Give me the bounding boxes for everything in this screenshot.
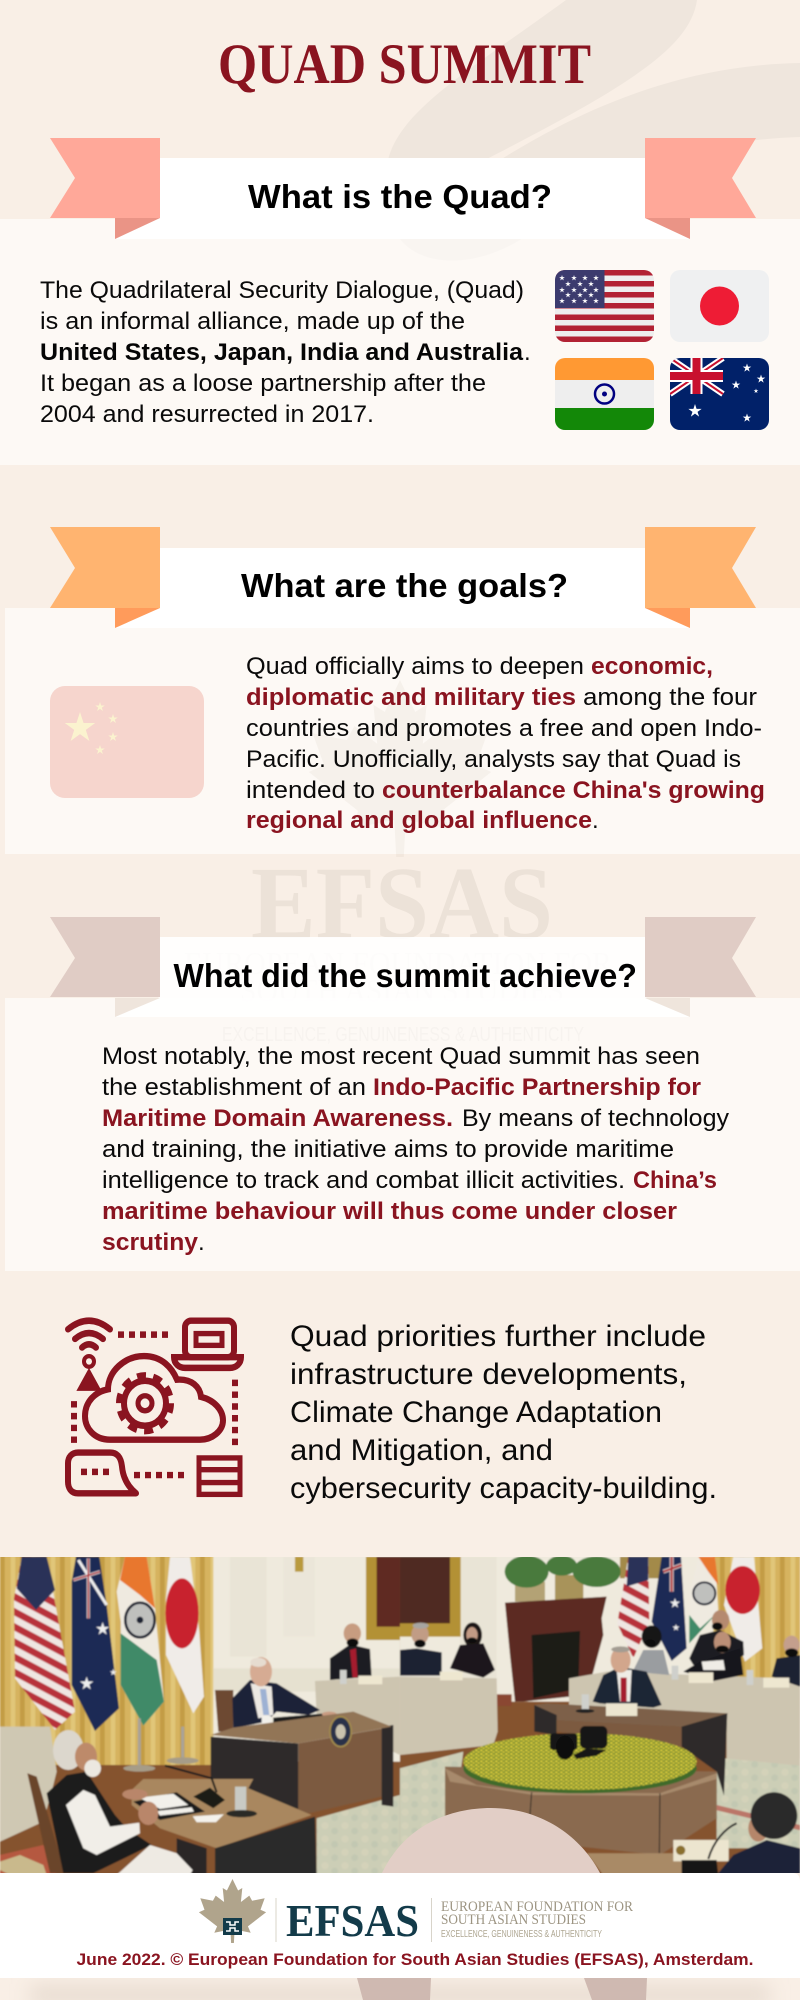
watermark: EFSAS wordmark: EUROPEAN FOUNDATION FOR [184, 945, 613, 981]
text: quad priorities: infrastructure developments, [290, 1358, 687, 1391]
text: summit achievements: intelligence to track and combat illicit activities. [102, 1167, 625, 1194]
text: summit achievements: . [198, 1229, 205, 1256]
text: quad definition: United States, Japan, India and Australia [40, 339, 524, 366]
decorative background swooshes [388, 0, 800, 261]
text: quad goals: counterbalance China's growing [382, 777, 765, 804]
photo left half [0, 1555, 400, 1875]
ribbon: what is the quad [50, 138, 756, 239]
text: quad goals: intended to [246, 777, 375, 804]
logo: EFSAS: EUROPEAN FOUNDATION FOR [441, 1899, 633, 1915]
heading: what is the quad: What is the Quad? [248, 178, 552, 215]
text: quad definition: The Quadrilateral Security Dialogue, (Quad) [40, 277, 524, 304]
panel: what are the goals [5, 527, 800, 857]
heading: what did the summit achieve: What did the summit achieve? [174, 957, 637, 994]
text: summit achievements [102, 1043, 729, 1256]
icon: faded flag of china [50, 686, 204, 798]
text: quad definition [40, 277, 531, 428]
text: quad goals: among the four [583, 684, 757, 711]
icon: flag of japan [670, 270, 769, 342]
pink dome decoration [382, 1808, 600, 1873]
text: quad goals: . [592, 807, 599, 834]
watermark: EFSAS wordmark: EFSAS [251, 846, 553, 961]
icon: flag of australia [670, 358, 769, 430]
decorative shapes below footer [357, 1978, 647, 2000]
footer panel [0, 1873, 800, 1978]
text: quad priorities: Quad priorities further include [290, 1320, 706, 1353]
panel: what is the quad [0, 138, 800, 465]
text: quad goals: diplomatic and military ties [246, 684, 576, 711]
footer credit: June 2022. © European Foundation for South Asian Studies (EFSAS), Amsterdam. [76, 1950, 754, 1969]
watermark: EFSAS wordmark: EXCELLENCE, GENUINENESS & AUTHENTICITY [222, 1024, 584, 1046]
text: quad priorities: cybersecurity capacity-building. [290, 1472, 717, 1505]
watermark: EFSAS wordmark [184, 846, 613, 1046]
icon: flag of the united states [555, 270, 654, 342]
text: summit achievements: the establishment of an [102, 1074, 366, 1101]
watermark: faded maple leaf [309, 680, 491, 857]
ribbon: what are the goals [50, 527, 756, 628]
text: summit achievements: China’s [633, 1167, 717, 1194]
photo right half [400, 1555, 800, 1875]
photo: quad leaders around the summit table [0, 1555, 800, 1875]
heading: what are the goals: What are the goals? [241, 567, 568, 604]
ribbon: what did the summit achieve [50, 917, 756, 1017]
logo: EFSAS: EFSAS [286, 1895, 419, 1946]
text: summit achievements: scrutiny [102, 1229, 199, 1256]
watermark: EFSAS wordmark: SOUTH ASIAN STUDIES [240, 972, 564, 1008]
text: summit achievements: Most notably, the most recent Quad summit has seen [102, 1043, 700, 1070]
text: summit achievements: maritime behaviour will thus come under closer [102, 1198, 677, 1225]
text: quad definition: 2004 and resurrected in 2017. [40, 401, 374, 428]
text: summit achievements: By means of technology [462, 1105, 729, 1132]
title: QUAD SUMMIT [218, 33, 591, 96]
text: summit achievements: and training, the initiative aims to provide maritime [102, 1136, 674, 1163]
panel: what did the summit achieve [5, 917, 800, 1271]
text: quad goals: Quad officially aims to deepen [246, 653, 584, 680]
text: quad priorities [290, 1320, 717, 1505]
text: quad goals: economic, [591, 653, 713, 680]
logo: EFSAS: SOUTH ASIAN STUDIES [441, 1912, 586, 1928]
text: quad definition: . [524, 339, 531, 366]
text: quad definition: is an informal alliance, made up of the [40, 308, 465, 335]
icon: flag of india [555, 358, 654, 430]
logo: EFSAS: EXCELLENCE, GENUINENESS & AUTHENTICITY [441, 1929, 602, 1940]
text: quad goals [246, 653, 765, 834]
text: quad goals: regional and global influence [246, 807, 592, 834]
text: quad priorities: and Mitigation, and [290, 1434, 553, 1467]
icon: cloud network [68, 1321, 241, 1494]
footer shadow [30, 1984, 770, 2000]
text: quad goals: countries and promotes a free and open Indo- [246, 715, 762, 742]
text: summit achievements: Maritime Domain Awareness. [102, 1105, 453, 1132]
logo: EFSAS [199, 1879, 633, 1946]
text: quad definition: It began as a loose partnership after the [40, 370, 486, 397]
text: quad goals: Pacific. Unofficially, analysts say that Quad is [246, 746, 741, 773]
text: summit achievements: Indo-Pacific Partnership for [373, 1074, 701, 1101]
text: quad priorities: Climate Change Adaptation [290, 1396, 662, 1429]
